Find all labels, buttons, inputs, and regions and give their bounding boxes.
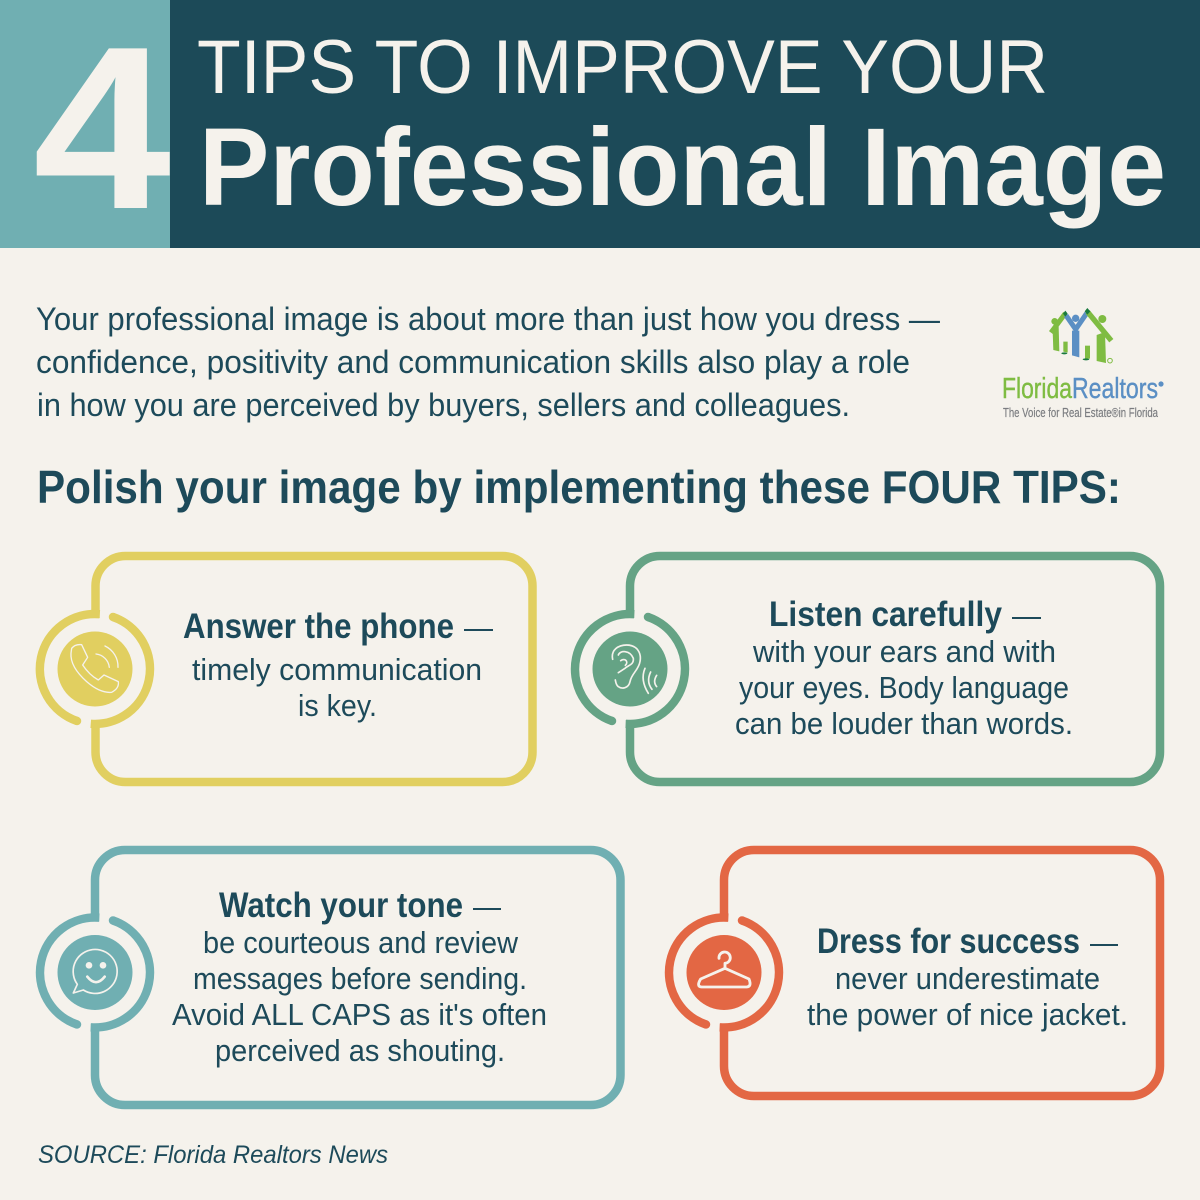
panel: answer the phone — [40, 556, 532, 782]
intro paragraph: confidence, positivity and communication skills also play a role — [36, 344, 910, 380]
card outline — [40, 556, 532, 782]
logo wordmark: Florida — [1002, 373, 1073, 405]
card outline — [575, 556, 1160, 782]
tip text: Listen carefully — [769, 595, 1002, 634]
tip text: timely communication — [192, 652, 482, 687]
tip text: the power of nice jacket. — [807, 997, 1128, 1032]
source note: SOURCE: Florida Realtors News — [38, 1141, 388, 1169]
tip text: — — [1090, 925, 1118, 960]
logo: Florida Realtors: Realtors — [1072, 373, 1158, 405]
card outline — [669, 850, 1160, 1096]
icon: ear — [612, 645, 657, 693]
logo: Florida Realtors — [1002, 308, 1164, 420]
tip text: your eyes. Body language — [739, 670, 1069, 705]
tip text: with your ears and with — [752, 634, 1056, 669]
panel: listen carefully — [575, 556, 1160, 782]
icon: smiling speech bubble — [73, 949, 117, 993]
tip text: Answer the phone — [183, 607, 454, 646]
logo icon: houses and people — [1051, 308, 1112, 363]
tip text: Avoid ALL CAPS as it's often — [172, 997, 547, 1032]
tip text: is key. — [298, 688, 377, 723]
icon: coat hanger — [699, 952, 750, 987]
tip text — [183, 607, 493, 723]
tip text: Dress for success — [817, 922, 1080, 961]
intro paragraph: in how you are perceived by buyers, sellers and colleagues. — [37, 387, 850, 423]
header banner — [0, 0, 1200, 258]
tip text: be courteous and review — [203, 925, 519, 960]
tip text — [172, 886, 547, 1068]
numeral 4: 4 — [33, 0, 171, 258]
tip text: — — [1012, 598, 1041, 633]
tip text: — — [473, 889, 501, 924]
card outline — [40, 850, 621, 1105]
tip text: can be louder than words. — [735, 706, 1073, 741]
intro paragraph — [36, 301, 940, 423]
tip text: — — [464, 610, 493, 645]
title line 2: Professional Image — [199, 106, 1166, 229]
intro paragraph: Your professional image is about more than just how you dress — — [36, 301, 940, 337]
section heading: Polish your image by implementing these FOUR TIPS: — [37, 461, 1121, 513]
title line 1: TIPS TO IMPROVE YOUR — [197, 25, 1048, 110]
tip text: Watch your tone — [219, 886, 463, 925]
tip text: never underestimate — [835, 961, 1100, 996]
panel: watch your tone — [40, 850, 621, 1105]
tip text: messages before sending. — [193, 961, 527, 996]
tip text: perceived as shouting. — [215, 1033, 505, 1068]
panel: dress for success — [669, 850, 1160, 1096]
tip text — [807, 922, 1128, 1032]
icon: phone — [71, 645, 118, 692]
tip text — [735, 595, 1073, 741]
